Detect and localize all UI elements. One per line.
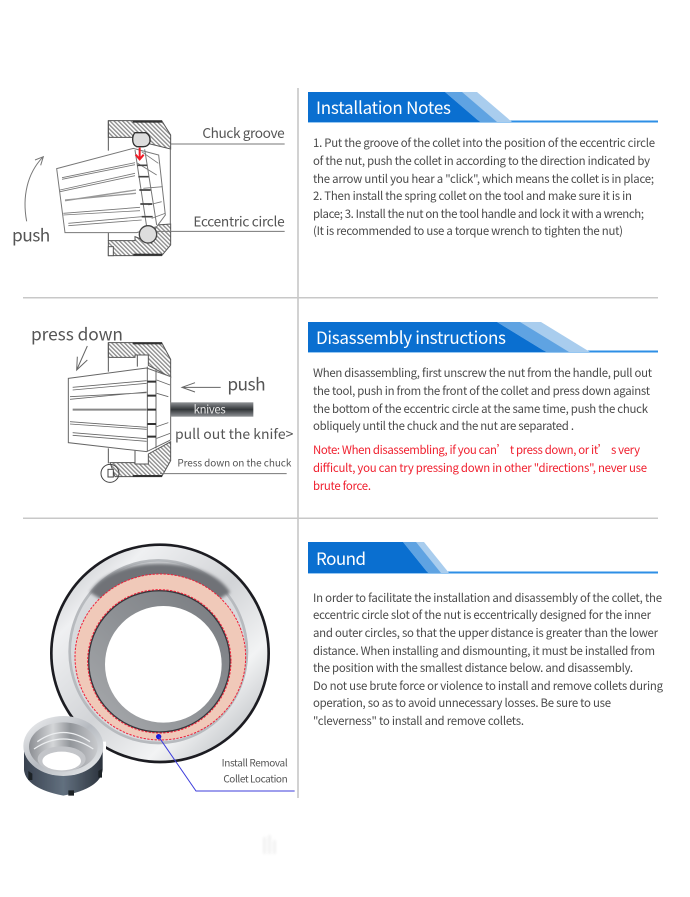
label: install removal collet location: [222, 754, 288, 786]
small nut: [21, 716, 106, 800]
body text: 1. Put the groove of the collet into the position of the eccentric circle: [313, 135, 655, 151]
red arrow: [136, 148, 144, 159]
leader: eccentric circle: [157, 230, 285, 233]
chuck groove ball: [133, 133, 150, 147]
collet body: [68, 367, 171, 452]
body text: of the nut, push the collet in according to the direction indicated by: [313, 153, 650, 169]
panel: disassembly instructions: [308, 322, 658, 494]
circled detail: [101, 464, 119, 482]
banner: Round: [316, 545, 366, 570]
body text: the tool, push in from the front of the collet and press down against: [313, 383, 651, 399]
label: pull out the knife: pull out the knife>: [175, 424, 294, 444]
body text: eccentric circle slot of the nut is eccentrically designed for the inner: [313, 607, 652, 623]
panel: round: [308, 542, 664, 729]
nut cross-section, top: [108, 121, 171, 151]
faint watermark: [263, 835, 276, 854]
body text: and outer circles, so that the upper distance is greater than the lower: [313, 625, 659, 641]
body text: the arrow until you hear a "click", which means the collet is in place;: [313, 171, 654, 187]
label: press down on the chuck: Press down on the chuck: [177, 454, 292, 469]
label: install removal collet location: Collet Location: [223, 771, 288, 786]
body text: the position with the smallest distance below. and disassembly.: [313, 660, 633, 676]
body text: place; 3. Install the nut on the tool handle and lock it with a wrench;: [313, 206, 644, 222]
label: push: push: [227, 371, 266, 396]
divider: vertical: [297, 88, 299, 798]
leader: [160, 472, 287, 475]
collet body: [57, 148, 165, 233]
inner grey ring: [89, 591, 230, 732]
blue location dot: [156, 734, 161, 739]
nut right edge: [169, 148, 172, 225]
body text: obliquely until the chuck and the nut are separated .: [313, 418, 574, 434]
banner: [308, 92, 658, 122]
leader line: [159, 737, 295, 791]
red note: difficult, you can try pressing down in other "directions", never use: [313, 460, 647, 476]
divider: lower horizontal: [23, 518, 658, 519]
banner: [308, 322, 658, 352]
body text: distance. When installing and dismounting, it must be installed from: [313, 643, 655, 659]
body text: (It is recommended to use a torque wrench to tighten the nut): [313, 223, 623, 239]
knife shank with label: [171, 402, 253, 418]
body text: [313, 590, 664, 729]
body text: Do not use brute force or violence to install and remove collets during: [313, 678, 664, 694]
large nut: [50, 543, 270, 763]
label: eccentric circle: Eccentric circle: [193, 210, 285, 230]
label: push: push: [12, 221, 50, 246]
nut cross-section, bottom: [108, 224, 171, 256]
eccentric slot, pink band: [75, 574, 246, 740]
body text: When disassembling, first unscrew the nut from the handle, pull out: [313, 365, 653, 381]
push arrow: [182, 383, 221, 392]
red note: Note: When disassembling, if you can’ t press down, or it’ s very: [313, 442, 640, 458]
thread shadow: [97, 572, 223, 597]
nut cross-section, bottom: [108, 355, 171, 477]
knife shank with label: knives: [194, 402, 226, 418]
diagram: collet installation: [12, 121, 285, 256]
press down arrow: [77, 346, 87, 370]
banner: Disassembly instructions: [316, 324, 506, 349]
diagram: collet disassembly: [31, 321, 294, 482]
nut cross-section, top: [108, 342, 171, 377]
body text: "cleverness" to install and remove collets.: [313, 713, 524, 729]
red note: brute force.: [313, 478, 371, 494]
red note: [313, 442, 647, 494]
banner: [308, 542, 658, 574]
banner: Installation Notes: [316, 94, 451, 119]
body text: [313, 135, 655, 239]
panel: installation notes: [308, 92, 658, 239]
label: install removal collet location: Install Removal: [222, 754, 288, 769]
leader: chuck groove: [171, 142, 285, 145]
body text: the bottom of the eccentric circle at the same time, push the chuck: [313, 401, 649, 417]
body text: [313, 365, 653, 434]
body text: operation, so as to avoid unnecessary losses. Be sure to use: [313, 695, 611, 711]
photo: nut with collet location: [21, 543, 295, 800]
body text: 2. Then install the spring collet on the tool and make sure it is in: [313, 188, 632, 204]
body text: In order to facilitate the installation and disassembly of the collet, the: [313, 590, 662, 606]
central opening: [105, 606, 222, 723]
push arrow: [25, 157, 43, 221]
label: press down: press down: [31, 321, 123, 346]
label: chuck groove: Chuck groove: [202, 122, 285, 142]
divider: upper horizontal: [23, 297, 658, 298]
eccentric ball: [139, 226, 157, 243]
